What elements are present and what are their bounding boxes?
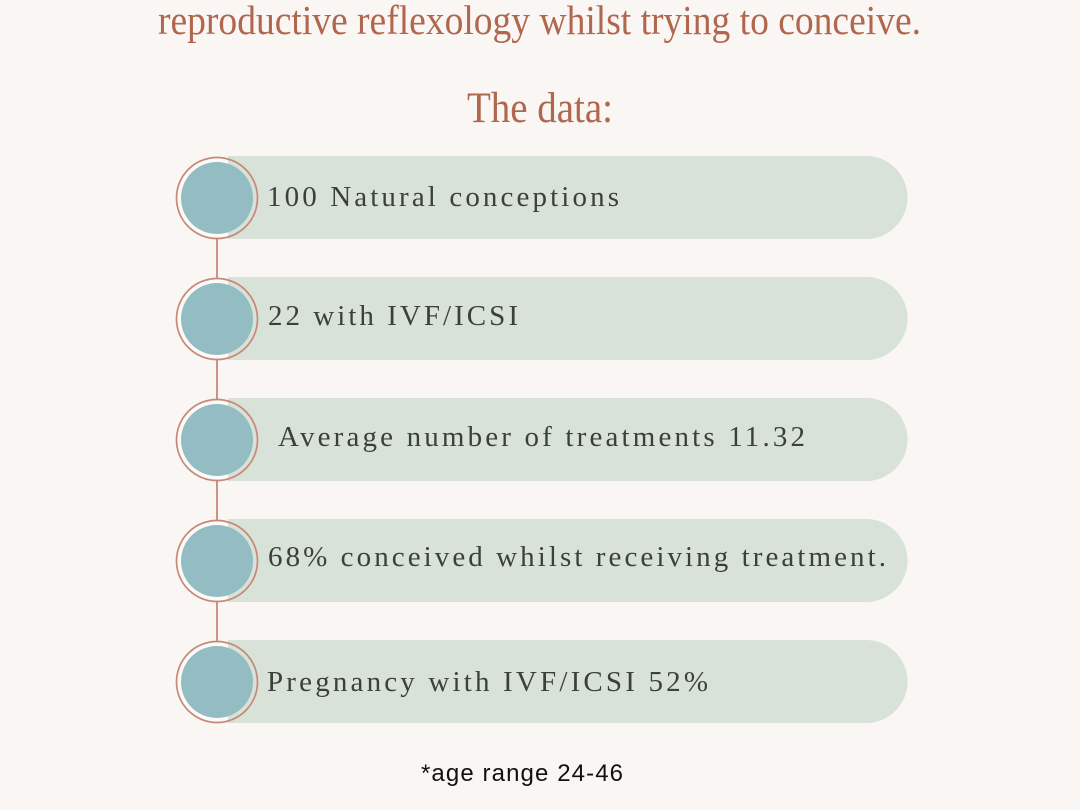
row 4: conceived during treatment: 68% conceived whilst receiving treatment. bbox=[268, 541, 886, 573]
row 3: average treatments bbox=[176, 398, 908, 481]
row 4: conceived during treatment bbox=[176, 519, 908, 602]
row 1: natural conceptions: 100 Natural conceptions bbox=[267, 181, 619, 213]
footnote: *age range 24-46 bbox=[421, 760, 623, 787]
row 2: IVF/ICSI bbox=[176, 277, 908, 360]
row 1: natural conceptions bbox=[176, 156, 908, 239]
row 3: average treatments: Average number of treatments 11.32 bbox=[278, 421, 805, 453]
timeline connector bbox=[216, 239, 218, 641]
row 5: pregnancy with IVF/ICSI bbox=[176, 640, 908, 723]
row 2: IVF/ICSI: 22 with IVF/ICSI bbox=[268, 300, 518, 332]
row 5: pregnancy with IVF/ICSI: Pregnancy with IVF/ICSI 52% bbox=[267, 666, 708, 698]
heading: The data: The data: bbox=[467, 85, 613, 132]
